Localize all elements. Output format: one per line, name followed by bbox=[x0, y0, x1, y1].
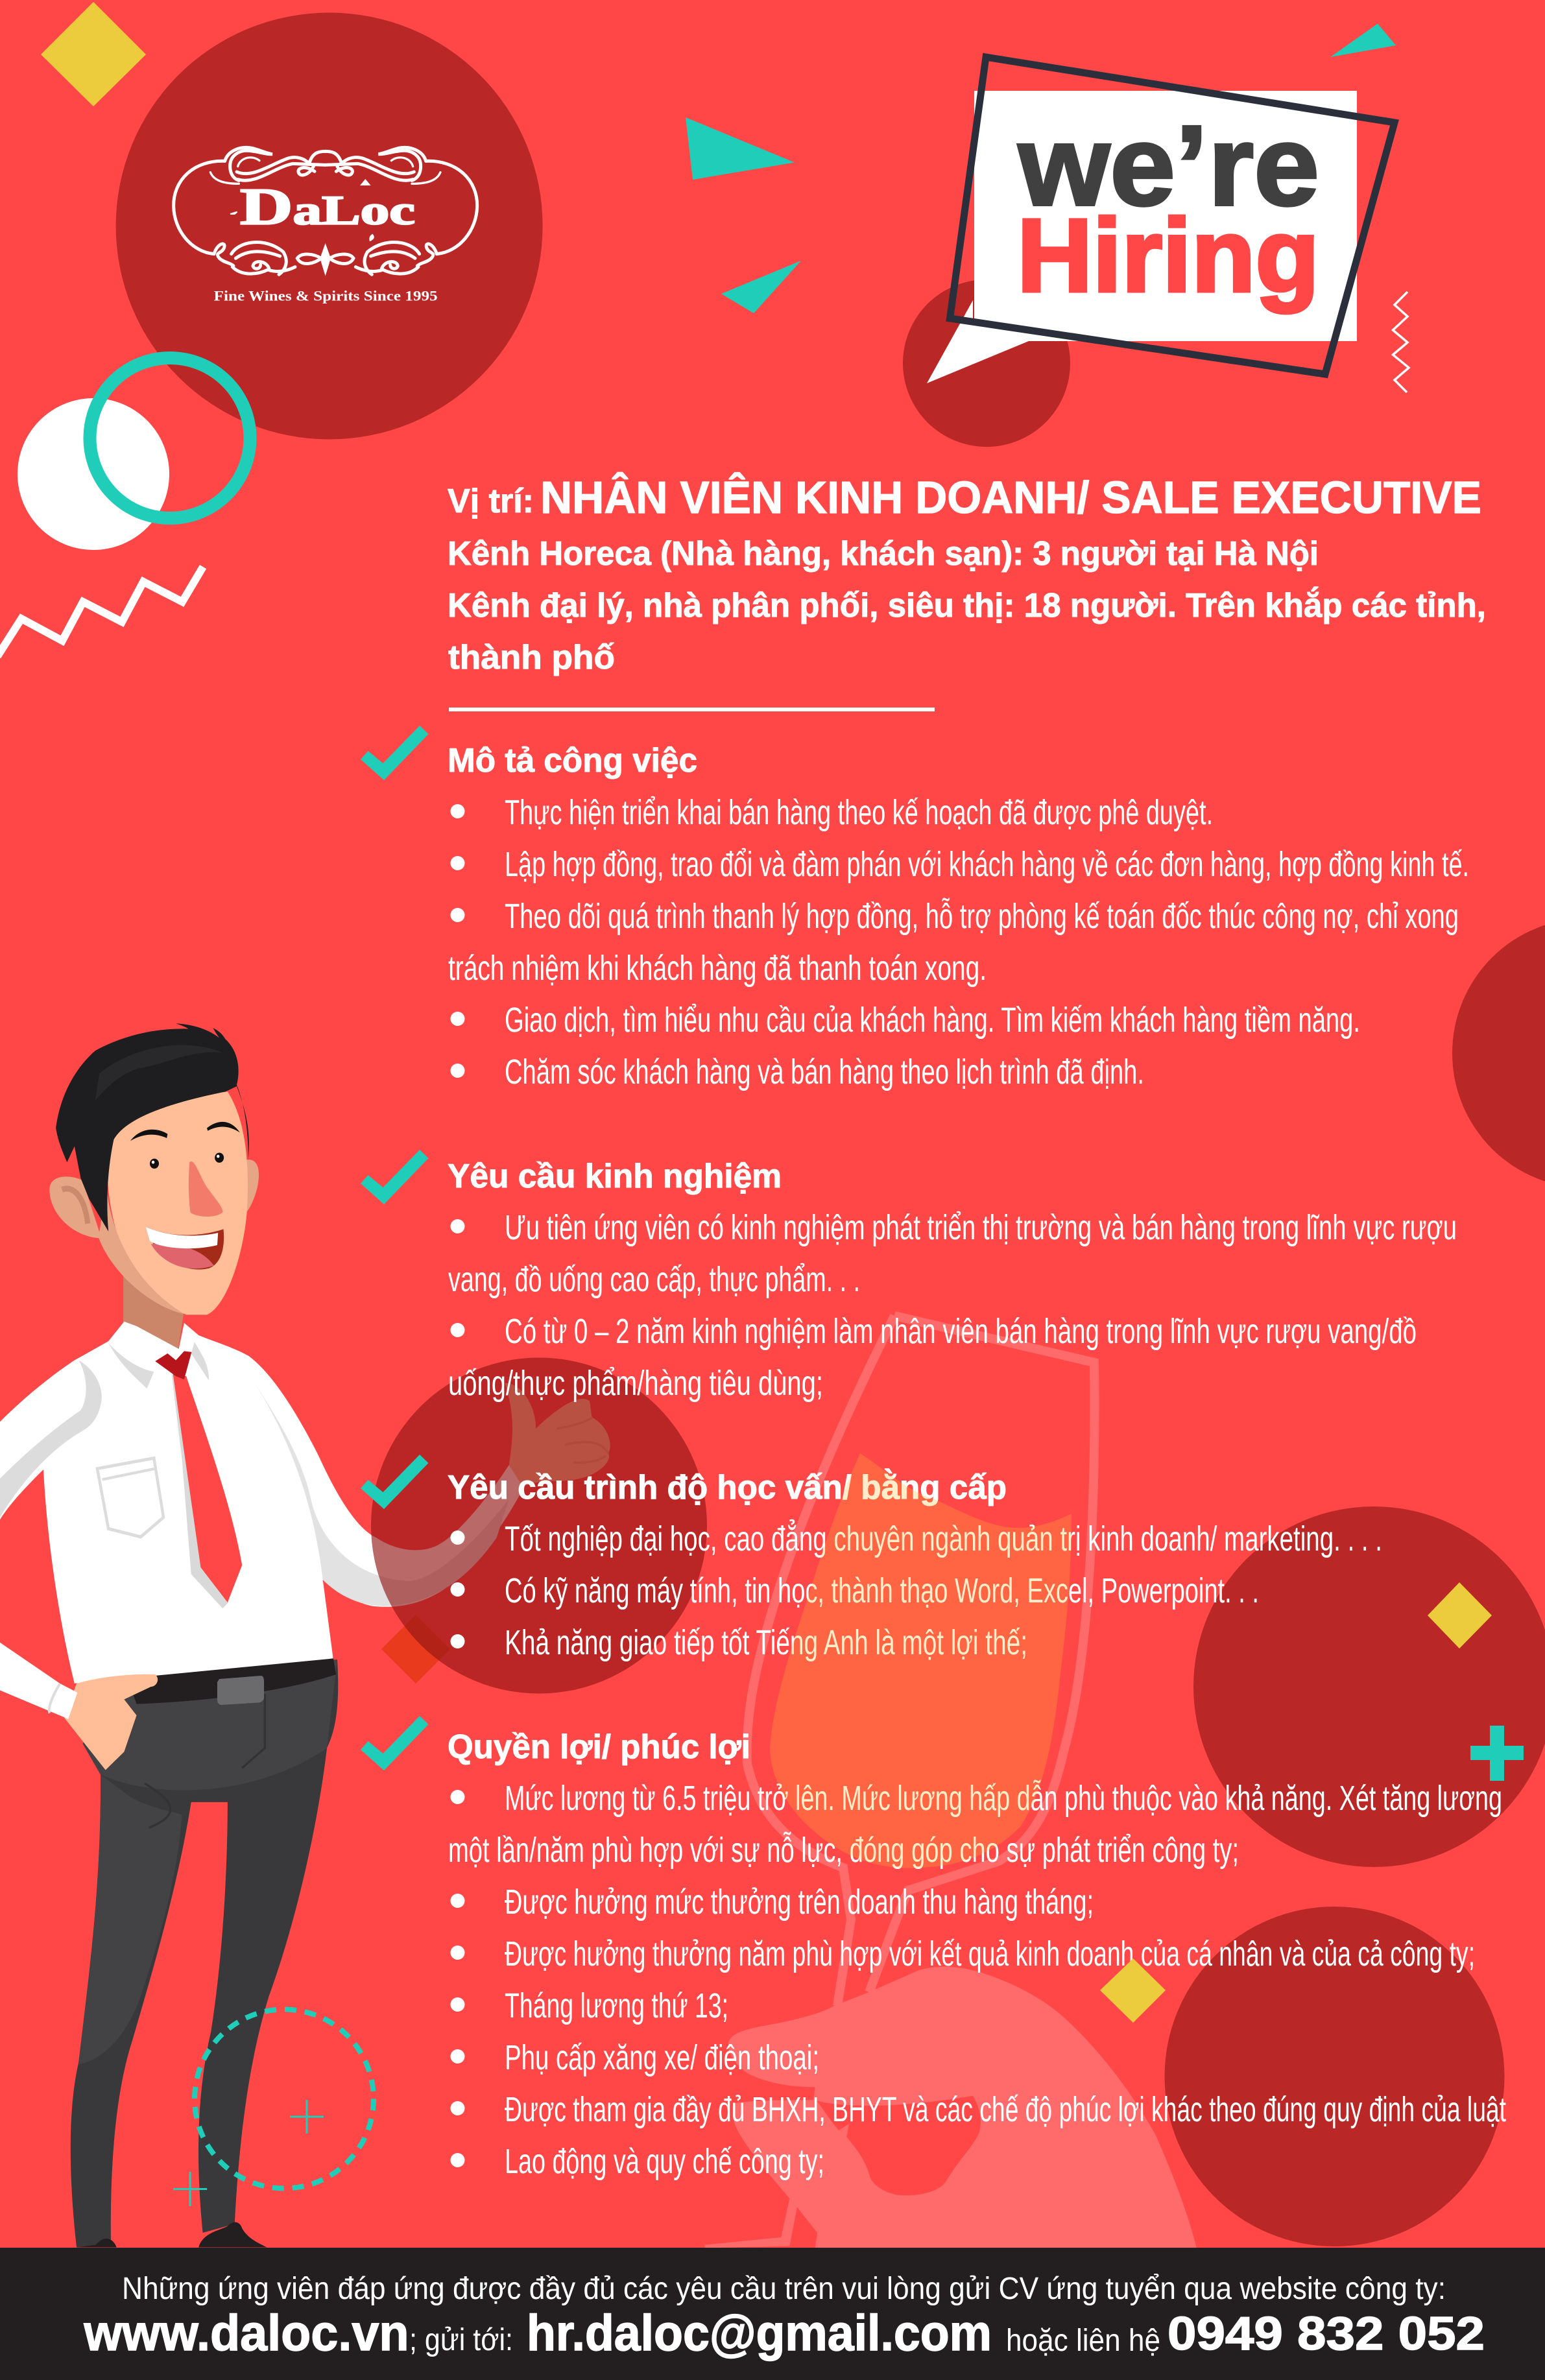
hair highlight bbox=[95, 1045, 224, 1101]
sleeve shadow left bbox=[0, 1361, 102, 1517]
nose bbox=[189, 1161, 222, 1217]
white zigzag right bbox=[1393, 292, 1409, 392]
bullets bbox=[450, 1790, 464, 2167]
footer band bbox=[0, 2248, 1545, 2380]
dashed circle bbox=[195, 2009, 374, 2188]
section: job description: trách nhiệm khi khách hàng đã thanh toán xong. bbox=[448, 949, 987, 988]
dark circle right middle bbox=[1193, 1506, 1545, 1867]
section: education: Khả năng giao tiếp tốt Tiếng Anh là một lợi thế; bbox=[505, 1623, 1027, 1662]
man character bbox=[0, 1023, 610, 2248]
white zigzag left bbox=[0, 567, 203, 656]
buckle bbox=[217, 1676, 264, 1705]
dark circle behind speech bubble bbox=[903, 280, 1070, 447]
channel lines: Kênh Horeca (Nhà hàng, khách sạn): 3 người tại Hà Nội bbox=[448, 535, 1319, 573]
tie shadow bbox=[172, 1373, 228, 1608]
section: education: Có kỹ năng máy tính, tin học, thành thạo Word, Excel, Powerpoint. . . bbox=[505, 1571, 1259, 1610]
section: experience: vang, đồ uống cao cấp, thực phẩm. . . bbox=[448, 1260, 860, 1299]
collar shadow bbox=[108, 1343, 154, 1388]
right ear bbox=[246, 1160, 259, 1212]
footer email: hr.daloc@gmail.com bbox=[527, 2304, 992, 2361]
shirt bbox=[0, 1322, 523, 1684]
yellow diamond bottom bbox=[1100, 1958, 1166, 2023]
we're text: we’re bbox=[1018, 102, 1319, 230]
tie bbox=[173, 1374, 242, 1602]
yellow diamond top left bbox=[41, 2, 146, 106]
heading: Quyền lợi/ phúc lợi bbox=[448, 1728, 750, 1766]
check icon 4 bbox=[361, 1716, 428, 1770]
hand silhouette bbox=[705, 1967, 1197, 2248]
position heading block: NHÂN VIÊN KINH DOANH/ SALE EXECUTIVE bbox=[540, 471, 1481, 523]
teal triangle 1 bbox=[686, 117, 795, 180]
glass outline bbox=[747, 1316, 1094, 2006]
bubble body bbox=[974, 91, 1357, 341]
section: job description bbox=[448, 742, 1469, 1091]
teal ring bbox=[90, 358, 250, 518]
section: benefits bbox=[448, 1728, 1506, 2181]
heading: Yêu cầu trình độ học vấn/ bằng cấp bbox=[448, 1468, 1007, 1506]
tie knot bbox=[155, 1351, 191, 1379]
left ear bbox=[49, 1176, 101, 1238]
sleeve shadow right bbox=[254, 1383, 509, 1606]
tilted dark frame bbox=[950, 57, 1395, 374]
check icon 3 bbox=[361, 1455, 428, 1509]
dark circle right bottom bbox=[1165, 1907, 1505, 2246]
neck bbox=[123, 1274, 184, 1351]
footer band: ; gửi tới: bbox=[409, 2323, 513, 2357]
check icon 1 bbox=[361, 726, 428, 780]
pocket bbox=[97, 1458, 163, 1537]
belt bbox=[75, 1657, 336, 1704]
hand on hip bbox=[64, 1674, 158, 1770]
hiring text: Hiring bbox=[1017, 197, 1319, 313]
wine fill bbox=[770, 1453, 1072, 1868]
thumbs up hand bbox=[505, 1383, 610, 1488]
orange diamond bbox=[381, 1615, 450, 1684]
logo: Da Loc bbox=[174, 147, 477, 303]
eyes bbox=[150, 1159, 159, 1169]
section: benefits: Tháng lương thứ 13; bbox=[505, 1986, 728, 2025]
teal plus bbox=[1470, 1726, 1524, 1781]
bullets bbox=[450, 1219, 464, 1337]
eyebrows bbox=[130, 1130, 167, 1141]
teal triangle 3 bbox=[1330, 23, 1396, 57]
bubble tail bbox=[927, 300, 1029, 383]
position heading block: thành phố bbox=[448, 639, 615, 676]
translucent dark circle over hand bbox=[371, 1358, 707, 1694]
section: benefits: Được hưởng mức thưởng trên doanh thu hàng tháng; bbox=[505, 1883, 1094, 1922]
section: benefits: Lao động và quy chế công ty; bbox=[505, 2142, 824, 2181]
logo wordmark: DaLoc bbox=[240, 179, 415, 236]
left forearm cuff bbox=[0, 1643, 77, 1719]
section: job description: Chăm sóc khách hàng và bán hàng theo lịch trình đã định. bbox=[505, 1053, 1144, 1091]
speech bubble: we're hiring bbox=[927, 57, 1395, 383]
bullets bbox=[450, 804, 464, 1078]
logo circle bbox=[116, 13, 543, 440]
bullets bbox=[450, 1530, 464, 1648]
position heading block bbox=[448, 471, 1486, 676]
footer instruction: Những ứng viên đáp ứng được đầy đủ các yêu cầu trên vui lòng gửi CV ứng tuyển qua website công ty: bbox=[122, 2272, 1446, 2306]
logo ornament frame bbox=[174, 147, 477, 276]
lines: Thực hiện triển khai bán hàng theo kế hoạch đã được phê duyệt. bbox=[505, 793, 1213, 832]
logo tagline: Fine Wines & Spirits Since 1995 bbox=[214, 287, 438, 303]
face shadow bbox=[99, 1187, 184, 1314]
trousers and shoes bbox=[71, 1660, 338, 2248]
heading: Mô tả công việc bbox=[448, 742, 697, 779]
small plus 1 bbox=[290, 2100, 324, 2134]
small plus 2 bbox=[173, 2172, 207, 2206]
position title: Vị trí: bbox=[448, 482, 534, 520]
mouth bbox=[146, 1227, 224, 1270]
wine glass and hand silhouette bbox=[705, 1316, 1197, 2248]
teal triangle 2 bbox=[721, 261, 801, 313]
footer phone: 0949 832 052 bbox=[1168, 2308, 1485, 2360]
footer band: hoặc liên hệ bbox=[1006, 2324, 1160, 2358]
hair bbox=[56, 1023, 249, 1232]
dark circle right edge bbox=[1452, 918, 1545, 1188]
face bbox=[107, 1091, 248, 1315]
section: benefits: Phụ cấp xăng xe/ điện thoại; bbox=[505, 2038, 819, 2077]
divider bbox=[449, 708, 935, 711]
footer website: www.daloc.vn bbox=[84, 2304, 409, 2361]
position heading block: Kênh đại lý, nhà phân phối, siêu thị: 18 người. Trên khắp các tỉnh, bbox=[448, 586, 1486, 625]
section: experience: uống/thực phẩm/hàng tiêu dùng; bbox=[448, 1364, 823, 1403]
yellow diamond right bbox=[1428, 1582, 1492, 1648]
check icon 2 bbox=[361, 1150, 428, 1204]
heading: Yêu cầu kinh nghiệm bbox=[448, 1158, 782, 1195]
white circle bbox=[18, 398, 169, 550]
section: education bbox=[448, 1468, 1382, 1662]
section: experience bbox=[448, 1158, 1457, 1403]
section: benefits: một lần/năm phù hợp với sự nỗ lực, đóng góp cho sự phát triển công ty; bbox=[448, 1831, 1239, 1870]
